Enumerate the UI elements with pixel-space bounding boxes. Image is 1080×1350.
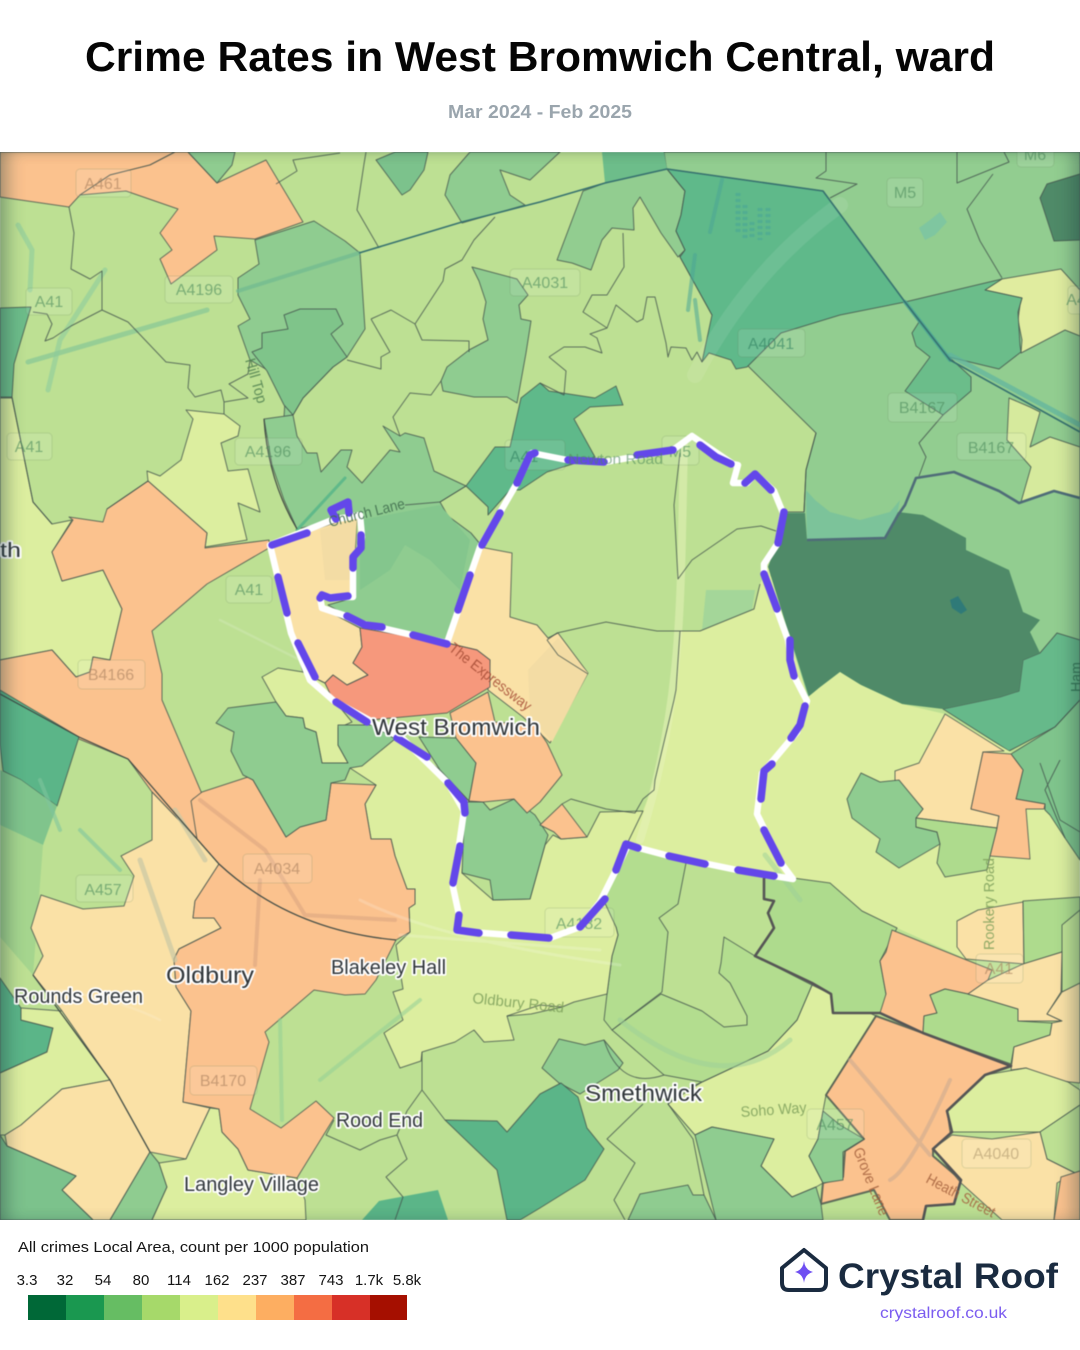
minor street labels: Newton Road [568,451,663,468]
map zones: crime rate areas [0,152,1080,1220]
ward boundary: white base line [270,436,807,938]
minor street labels: Oldbury Road [472,990,565,1017]
legend value labels [17,1272,422,1289]
road number badges: M5 [669,444,691,461]
legend value labels: 743 [318,1272,344,1289]
road number badges: A4031 [522,275,568,292]
legend value labels: 5.8k [393,1272,422,1289]
road number badges: A4041 [748,336,794,353]
road number badges: A41 [235,582,263,599]
legend value labels: 32 [57,1272,73,1289]
icon: Crystal Roof house logo [782,1250,826,1290]
road number badges: B4167 [968,440,1014,457]
subtitle: date range: Mar 2024 - Feb 2025 [448,102,632,122]
town and place labels: Langley Village [184,1174,319,1196]
brand url: crystalroof.co.uk [880,1305,1008,1322]
town and place labels: Rounds Green [14,986,143,1008]
legend title: All crimes Local Area, count per 1000 population [18,1240,369,1256]
legend value labels: 54 [95,1272,111,1289]
zone boundary lines [12,152,1080,1220]
minor street labels: Heath Street [923,1171,999,1222]
road number badges: A4196 [245,444,291,461]
road number badges: A41 [510,449,538,466]
title: Crime Rates in West Bromwich Central, ward [85,33,995,80]
road number badges: M5 [894,185,916,202]
road number badges: A4182 [556,916,602,933]
road number badges: A457 [84,882,122,899]
legend colour bar [28,1295,407,1320]
town and place labels: West Bromwich [372,714,540,740]
minor street labels [241,356,1080,1222]
road number badges: B4167 [899,400,945,417]
legend value labels: 162 [204,1272,230,1289]
minor street labels: Grove Lane [849,1145,892,1218]
minor street labels: The Expressway [446,640,535,715]
legend scale [17,1272,422,1320]
town and place labels: Oldbury [166,962,255,988]
legend value labels: 387 [280,1272,306,1289]
road number badges: A457 [816,1117,854,1134]
road number badges: A4196 [176,282,222,299]
motorways, rivers and roads [18,180,1080,1180]
brand name: Crystal Roof [838,1257,1058,1296]
dark boundary lines: motorway and borough [0,169,1080,1220]
minor street labels: Church Lane [327,496,407,531]
road number badges: A41 [35,294,63,311]
town and place labels: Blakeley Hall [331,957,446,979]
town and place labels: th [0,540,21,562]
town and place labels: Rood End [336,1110,423,1132]
minor street labels: Soho Way [740,1099,808,1121]
legend value labels: 1.7k [355,1272,384,1289]
road number badges: B4166 [88,667,134,684]
road number badges [7,140,1080,1168]
road number badges: A41 [985,961,1013,978]
ward boundary: purple dashes [272,445,805,938]
road number badges: B4170 [200,1073,246,1090]
road number badges: A461 [84,176,122,193]
road number badges: M6 [1024,147,1046,164]
town and place labels: Smethwick [585,1080,703,1106]
minor street labels: Hill Top [241,356,270,405]
town and place labels [0,540,703,1196]
legend value labels: 114 [167,1272,191,1289]
road number badges: A4040 [973,1146,1019,1163]
legend value labels: 80 [133,1272,149,1289]
road number badges: A4034 [254,861,300,878]
road number badges: A41 [15,439,43,456]
minor street labels: Rookery Road [981,858,998,950]
legend value labels: 237 [242,1272,268,1289]
legend value labels: 3.3 [17,1272,37,1289]
map edge vignette [0,152,1080,1220]
